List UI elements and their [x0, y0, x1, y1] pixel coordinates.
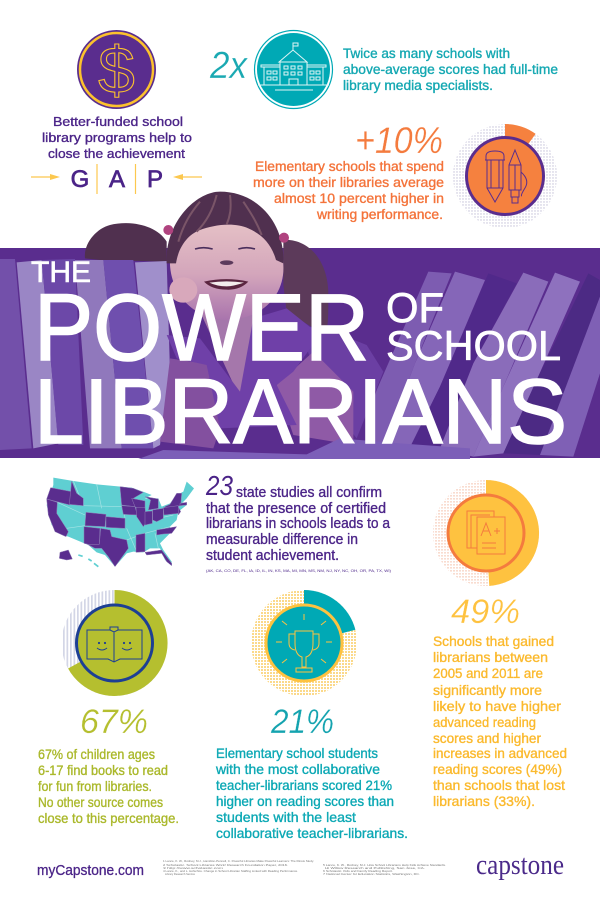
49 percent text: Schools that gained: [433, 633, 554, 649]
state studies text: 23: [205, 470, 233, 501]
panel: funding gap: [31, 30, 202, 194]
writing text: [253, 159, 444, 222]
21 percent text: with the most collaborative: [215, 761, 380, 777]
49 percent text: than schools that lost: [433, 777, 565, 793]
67 percent text: No other source comes: [38, 794, 163, 810]
writing text: Elementary schools that spend: [255, 159, 444, 174]
footnotes column one: Library Research Service: [165, 872, 196, 876]
49 percent text: [433, 633, 567, 809]
state studies text: librarians in schools leads to a: [206, 515, 391, 532]
icon: dollar coin: [77, 30, 156, 109]
49 percent text: reading scores (49%): [433, 761, 562, 777]
writing text: more on their libraries average: [253, 175, 444, 190]
funding text: close the achievement: [48, 146, 185, 161]
49 percent text: scores and higher: [433, 730, 541, 746]
list of states: (AK, CA, CO, DE, FL, IA, ID, IL, IN, KS, MA, MI, MN, MS, NM, NJ, NY, NC, OH, OR, PA, TX, WI): [206, 569, 391, 573]
footnotes column two: 6 Scholastic. Kids and Family Reading Report.: [323, 869, 393, 873]
footnotes column one: 3 http://www.scholastic.com: [163, 866, 224, 870]
67 percent text: 6-17 find books to read: [38, 762, 168, 778]
big number +10%: +10%: [355, 120, 443, 161]
arms and chest: [160, 358, 220, 448]
state studies text: that the presence of certified: [206, 500, 386, 517]
donut chart with report card icon: [433, 480, 539, 586]
state studies text: measurable difference in: [206, 531, 358, 548]
hawaii: [78, 555, 98, 567]
footer: [37, 849, 564, 881]
67 percent text: [38, 746, 179, 826]
big number 67%: 67%: [80, 703, 148, 741]
icon: dollar coin: $: [98, 33, 135, 107]
footnotes column one: 2 Scholastic. School Libraries Work! Research Foundation Paper, 2016.: [163, 863, 288, 867]
panel: state studies: [47, 470, 391, 573]
footnotes column one: [163, 859, 314, 876]
title text: THE: [31, 256, 91, 289]
teal states: [47, 478, 194, 567]
title text: SCHOOL: [386, 322, 561, 369]
donut chart with book icon: [62, 590, 168, 696]
school text: Twice as many schools with: [343, 46, 510, 61]
title text: LIBRARIANS: [34, 361, 567, 463]
panel: 21 percent: [215, 590, 408, 841]
67 percent text: for fun from libraries.: [38, 778, 152, 794]
49 percent text: librarians between: [433, 649, 548, 665]
facial details: [195, 248, 255, 249]
21 percent text: students with the least: [216, 809, 356, 825]
website: myCapstone.com: [37, 862, 144, 879]
21 percent text: [215, 745, 408, 841]
footnotes column two: 7 National Center for Education Statistics, Washington, DC.: [323, 872, 420, 876]
open book: [138, 438, 470, 459]
hair: [167, 192, 283, 263]
right stack of books: [370, 272, 600, 457]
left books: [0, 259, 32, 450]
hand: [169, 277, 197, 303]
21 percent text: collaborative teacher-librarians.: [216, 825, 408, 841]
writing text: writing performance.: [316, 207, 443, 222]
49 percent text: likely to have higher: [433, 698, 561, 714]
title text: OF: [386, 284, 444, 331]
footnotes column one: 4 Lance, K., and L. Hofschire. Change in School Librarian Staffing Linked with Reading Performance.: [163, 869, 298, 873]
state studies text: student achievement.: [206, 547, 339, 564]
gap word with arrows: P: [147, 166, 163, 193]
49 percent text: advanced reading: [433, 714, 536, 730]
state studies text: [205, 470, 391, 564]
big number 21%: 21%: [270, 703, 334, 741]
49 percent text: 2005 and 2011 are: [433, 665, 543, 681]
big number 49%: 49%: [451, 593, 520, 631]
footnotes column two: Hi Willow Research and Publishing, San Jose, CA.: [325, 866, 425, 870]
writing text: almost 10 percent higher in: [274, 191, 444, 206]
49 percent text: increases in advanced: [433, 745, 567, 761]
hair ties: [163, 225, 173, 235]
21 percent text: Elementary school students: [216, 745, 378, 761]
school text: library media specialists.: [343, 78, 493, 93]
funding text: Better-funded school: [53, 114, 183, 129]
icon: school building: [254, 30, 332, 108]
capstone logo: capstone: [476, 849, 564, 881]
21 percent text: higher on reading scores than: [216, 793, 394, 809]
big number 2x: 2x: [209, 45, 249, 87]
footnotes column two: [323, 863, 446, 876]
school text: [343, 46, 558, 93]
67 percent text: close to this percentage.: [38, 810, 179, 826]
footnotes column two: 5 Lance, K. W., Rodney, M.J. How School Librarians Help Kids Achieve Standards.: [323, 863, 446, 867]
banner background: [0, 248, 600, 458]
hair strands: [178, 195, 262, 242]
school text: above-average scores had full-time: [343, 62, 558, 77]
gap word with arrows: [31, 164, 202, 194]
gap word with arrows: G: [71, 166, 89, 193]
photo: girl with books: [0, 192, 470, 459]
panel: ten percent writing: [253, 120, 557, 228]
49 percent text: librarians (33%).: [433, 793, 535, 809]
title text: POWER: [34, 275, 369, 381]
49 percent text: significantly more: [433, 682, 542, 698]
panel: title banner: [0, 192, 600, 463]
funding text: library programs help to: [42, 130, 192, 145]
map of the United States: [47, 478, 194, 567]
purple states: [47, 481, 187, 567]
panel: 67 percent: [38, 590, 179, 826]
dress back: [300, 325, 383, 438]
face: [170, 220, 283, 320]
funding text: [42, 114, 192, 161]
footnotes column one: 1 Lance, K. W., Rodney, M.J., Hamilton-Pennell, C. Powerful Libraries Make Powerful Learners: The Illinois Study.: [163, 859, 314, 863]
state studies text: state studies all confirm: [236, 484, 382, 501]
donut chart with trophy icon: [251, 590, 357, 696]
67 percent text: 67% of children ages: [38, 746, 155, 762]
left pigtail: [85, 223, 167, 262]
panel: twice as many schools: [209, 30, 558, 108]
shirt: [167, 308, 320, 428]
panel: 49 percent: [433, 480, 567, 809]
gap word with arrows: A: [109, 166, 125, 193]
icon: pencils donut: [453, 124, 557, 228]
title text: [31, 256, 567, 463]
21 percent text: teacher-librarians scored 21%: [216, 777, 392, 793]
right pigtail: [283, 240, 328, 335]
